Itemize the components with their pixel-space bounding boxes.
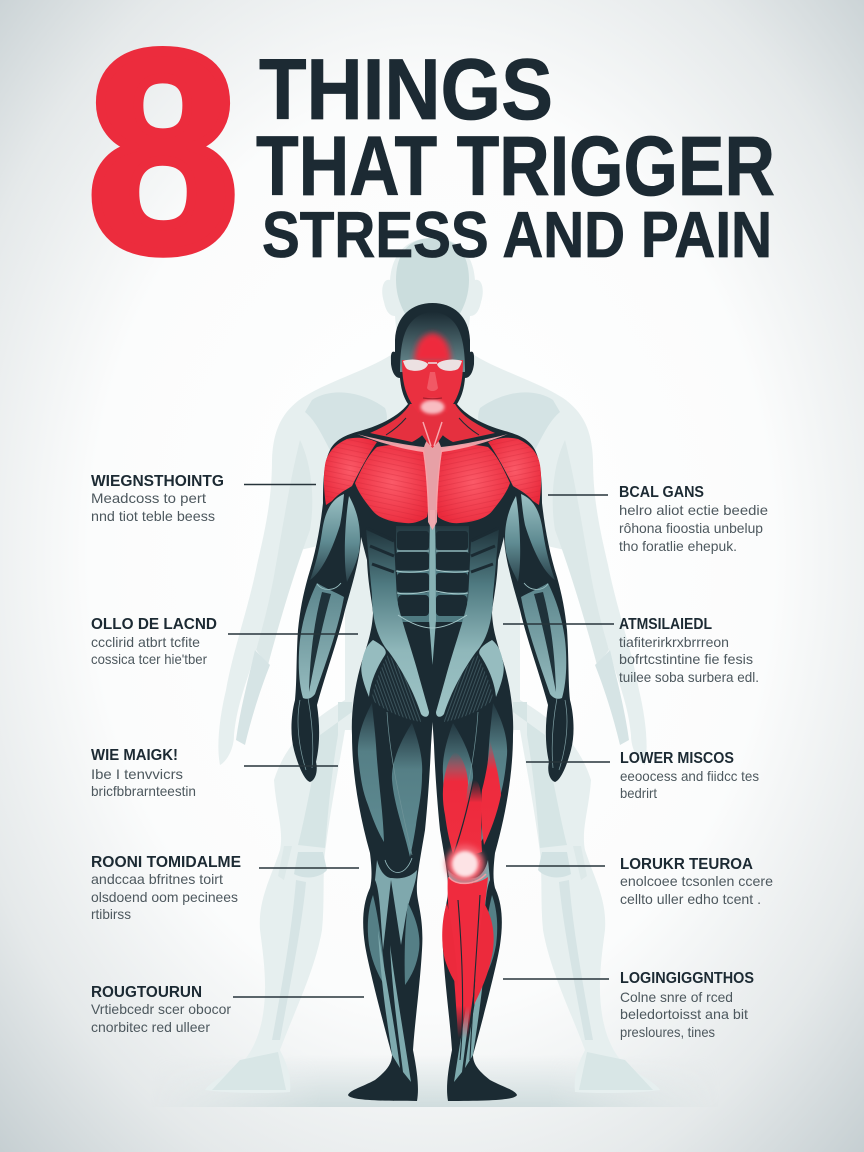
left label 5: cnorbitec red ulleer: [91, 1019, 210, 1035]
right label 2: bofrtcstintine fie fesis: [619, 651, 753, 667]
knee outline: [385, 858, 412, 872]
title: THAT TRIGGER: [256, 119, 775, 213]
red calf outer: [442, 903, 458, 986]
red thigh inner: [481, 740, 501, 845]
knee cap edge: [449, 874, 486, 883]
left label 4: ROONI TOMIDALME: [91, 854, 241, 871]
knee glow: [452, 851, 478, 877]
chin and mouth highlight: [420, 400, 444, 414]
left label 5: ROUGTOURUN: [91, 984, 202, 1001]
thigh line: [387, 712, 412, 855]
neck: [417, 412, 448, 448]
pectoral fibres: [355, 445, 429, 523]
right label 3: eeoocess and fiidcc tes: [620, 768, 759, 784]
hand outline: [298, 698, 313, 770]
body silhouette: [291, 303, 574, 1101]
upper arm muscles: [310, 494, 360, 582]
right label 2: tiafiterirkrxbrrreon: [619, 634, 729, 650]
left label 3: bricfbbrarnteestin: [91, 783, 196, 799]
calf outer: [368, 895, 386, 988]
left label 5: Vrtiebcedr scer obocor: [91, 1001, 231, 1017]
main anatomical body figure: [291, 303, 574, 1101]
knee band: [375, 860, 417, 950]
right label 5: Colne snre of rced: [620, 989, 733, 1005]
neck tendons: [423, 422, 442, 446]
left label 2: cossica tcer hie'tber: [91, 651, 207, 667]
left label 4: rtibirss: [91, 906, 131, 922]
nose: [427, 372, 438, 391]
floor shadow: [203, 1066, 666, 1107]
right label 5: presloures, tines: [620, 1024, 715, 1040]
scalp shading: [400, 312, 465, 372]
mirrored muscle groups: arms, obliques, abs, hips, legs: [298, 494, 567, 1082]
abs: [396, 531, 429, 616]
pale abdominal tendon lines: [396, 551, 469, 628]
oblique band: [366, 528, 429, 717]
forearm muscles: [299, 583, 344, 699]
knee soft halo: [446, 845, 484, 883]
title: [256, 42, 775, 271]
left label 4: andccaa bfritnes toirt: [91, 871, 223, 887]
right label 1: BCAL GANS: [619, 484, 704, 501]
red muscle areas of upper body: [324, 404, 541, 523]
red shin: [448, 877, 488, 1038]
right label 3: LOWER MISCOS: [620, 750, 734, 767]
left label 3: Ibe I tenvvicrs: [91, 766, 183, 782]
right label 5: LOGINGIGGNTHOS: [620, 970, 754, 987]
red thigh centre: [453, 780, 482, 860]
shin tendons: [378, 930, 411, 1082]
left label 2: ccclirid atbrt tcfite: [91, 634, 200, 650]
right label 5: [503, 970, 754, 1040]
red painful right leg: [442, 740, 501, 1060]
left label 5: [91, 984, 364, 1035]
abs centre line and tendon: [429, 510, 436, 665]
head and face: [400, 312, 465, 448]
left label 2: OLLO DE LACND: [91, 616, 217, 633]
sternum and clavicles: [357, 434, 508, 530]
left label 3: [91, 747, 338, 799]
left label 1: nnd tiot teble beess: [91, 508, 215, 524]
title: THINGS: [259, 42, 553, 138]
right label 2: ATMSILAIEDL: [619, 616, 712, 633]
left label 4: olsdoend oom pecinees: [91, 889, 238, 905]
forehead pain glow: [414, 333, 451, 362]
calf inner: [405, 903, 419, 985]
ghost figure: translucent skeleton behind body: [205, 238, 660, 1093]
left label 2: [91, 616, 358, 667]
quad inner: [392, 723, 422, 857]
shin lines: [458, 895, 480, 1060]
right label 1: rôhona fioostia unbelup: [619, 520, 763, 536]
right label 1: [548, 484, 768, 554]
pectoral: [355, 445, 429, 523]
right label 1: helro aliot ectie beedie: [619, 502, 768, 518]
right label 4: LORUKR TEUROA: [620, 856, 753, 873]
right label 2: tuilee soba surbera edl.: [619, 669, 759, 685]
left label 1: WIEGNSTHOINTG: [91, 473, 224, 490]
right label 4: enolcoee tcsonlen ccere: [620, 873, 773, 889]
right label 2: [503, 616, 759, 685]
thigh divider line: [453, 765, 476, 856]
left label 1: [91, 473, 316, 524]
groin fibres: [372, 654, 421, 722]
right label 1: tho foratlie ehepuk.: [619, 538, 737, 554]
right label 4: [506, 856, 773, 907]
face: [402, 360, 463, 417]
left label 3: WIE MAIGK!: [91, 747, 178, 764]
trapezius: [370, 404, 432, 442]
neck line: [386, 418, 406, 435]
mouth: [423, 397, 442, 400]
deltoid fibres: [324, 438, 377, 505]
quad outer: [358, 703, 384, 842]
hip crescent: [361, 640, 386, 697]
right label 3: bedrirt: [620, 785, 657, 801]
title number 8: 8: [88, 0, 238, 310]
glasses-like eye highlights: [403, 360, 462, 371]
right label 3: [526, 750, 759, 801]
right label 5: beledortoisst ana bit: [620, 1006, 748, 1022]
abdominal base: [396, 526, 432, 622]
title: STRESS AND PAIN: [262, 198, 772, 271]
rib shadows: [366, 528, 394, 572]
red calf inner: [474, 903, 494, 1005]
left label 4: [91, 854, 359, 922]
red thigh outer: [443, 752, 468, 857]
left label 1: Meadcoss to pert: [91, 490, 206, 506]
deltoid: [324, 438, 377, 505]
right label 4: cellto uller edho tcent .: [620, 891, 761, 907]
